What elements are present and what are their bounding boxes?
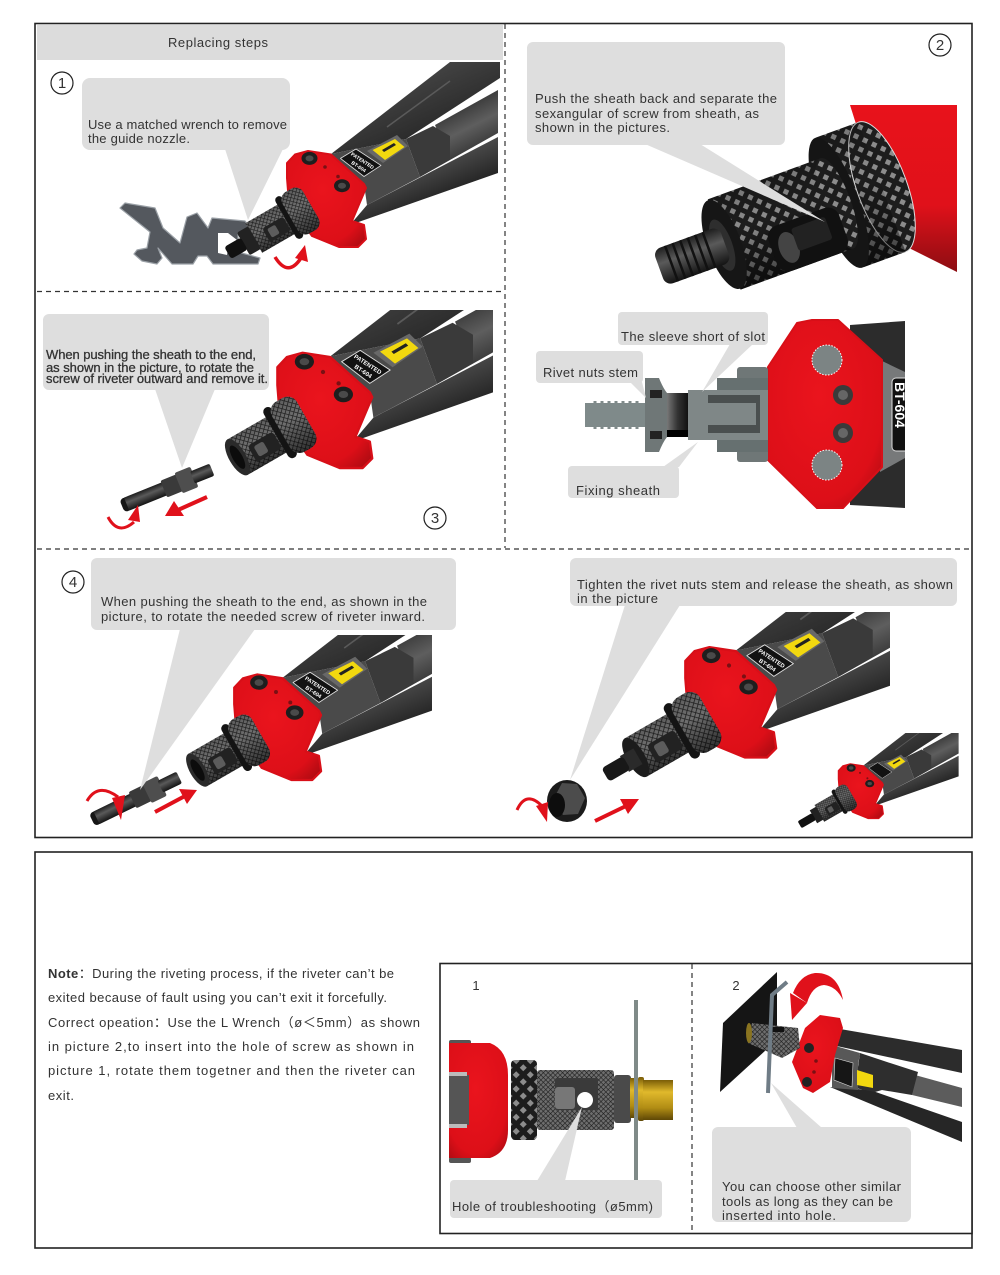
label: rivet nuts stem — [536, 351, 646, 398]
nozzle close-up — [636, 105, 957, 333]
callout: other similar tools: inserted into hole. — [722, 1208, 836, 1223]
callout: when pushing the sheath inward: When pushing the sheath to the end, as shown in the — [101, 594, 427, 609]
riveter — [224, 310, 493, 476]
text block: note: Correct opeation：Use the L Wrench（ø＜5mm）as shown — [48, 1015, 420, 1030]
step number 3 — [424, 507, 446, 529]
arrow: rotate — [517, 799, 548, 822]
riveter: PATENTED — [303, 676, 331, 697]
screw — [118, 459, 216, 516]
riveter side view — [449, 1000, 673, 1182]
text block: note: exit. — [48, 1088, 74, 1103]
riveter: PATENTED — [352, 354, 383, 377]
callout: push the sheath back — [527, 42, 825, 222]
small assembled riveter — [798, 733, 959, 828]
label: the sleeve short of slot — [618, 312, 768, 392]
callout: other similar tools: You can choose other similar — [722, 1179, 902, 1194]
riveter — [225, 62, 500, 258]
arrow: push in — [155, 789, 197, 812]
step number 2 — [929, 34, 951, 56]
picture 1 number: 1 — [472, 978, 480, 993]
callout: other similar tools: tools as long as they can be — [722, 1194, 893, 1209]
riveter: BT-604 — [350, 160, 367, 174]
callout: push the sheath back: sexangular of screw from sheath, as — [535, 106, 760, 121]
riveter: PATENTED — [349, 152, 375, 171]
riveter front view: BT-604 — [892, 382, 908, 428]
callout: push the sheath back: shown in the pictures. — [535, 120, 670, 135]
section of sleeve and stem — [585, 367, 768, 462]
text block: note: picture 1, rotate them togetner and then the riveter can — [48, 1063, 415, 1078]
callout: when pushing the sheath: screw of riveter outward and remove it. — [46, 371, 268, 386]
riveter — [602, 612, 890, 780]
label: the sleeve short of slot: The sleeve short of slot — [621, 329, 765, 344]
picture 2: using L wrench — [712, 972, 962, 1223]
riveter: BT-604 — [304, 685, 323, 701]
screw — [87, 768, 184, 830]
riveter: BT-604 — [353, 364, 373, 380]
step number 1 — [51, 72, 73, 94]
riveter angled view — [746, 1015, 962, 1142]
callout: tighten the rivet nuts stem — [570, 558, 957, 780]
heading: replacing steps: Replacing steps — [168, 35, 268, 50]
picture 2 number: 2 — [732, 978, 740, 993]
text block: note: exited because of fault using you can’t exit it forcefully. — [48, 990, 387, 1005]
step number 1: 1 — [58, 75, 66, 92]
step number 4: 4 — [69, 574, 77, 591]
panel: troubleshooting pictures — [440, 964, 972, 1234]
black plate — [720, 972, 777, 1092]
callout: when pushing the sheath inward: picture, to rotate the needed screw of riveter inward. — [101, 609, 425, 624]
arrow: rotate — [275, 245, 308, 268]
step 4: rotate screw inward — [62, 558, 468, 830]
label: fixing sheath — [568, 442, 698, 498]
callout: tighten the rivet nuts stem: in the picture — [577, 591, 658, 606]
step 1: remove guide nozzle — [51, 62, 500, 274]
panel: note frame — [35, 852, 972, 1248]
callout: hole of troubleshooting: Hole of troubleshooting（ø5mm) — [452, 1199, 653, 1214]
callout: tighten the rivet nuts stem: Tighten the rivet nuts stem and release the sheath, as shown — [577, 577, 953, 592]
rivet nut — [547, 780, 587, 822]
arrow: pull out — [165, 497, 207, 516]
arrow: rotate — [108, 505, 140, 528]
riveter front view — [768, 320, 912, 508]
riveter: PATENTED — [757, 648, 785, 670]
callout: when pushing the sheath: When pushing the sheath to the end, — [46, 347, 256, 362]
step number 3: 3 — [431, 510, 439, 527]
riveter: BT-604 — [757, 658, 777, 674]
text block: note: in picture 2,to insert into the hole of screw as shown in — [48, 1039, 414, 1054]
text block: note — [48, 966, 420, 1103]
icon: wrench — [120, 203, 260, 264]
callout: when pushing the sheath inward — [91, 558, 456, 790]
picture 1: hole of troubleshooting — [449, 1000, 673, 1218]
arrow: rotate — [87, 790, 125, 820]
label: rivet nuts stem: Rivet nuts stem — [543, 365, 638, 380]
callout: other similar tools — [712, 1083, 911, 1223]
callout: use a matched wrench: Use a matched wrench to remove — [88, 117, 287, 132]
cross-section diagram — [536, 312, 912, 508]
panel: replacing steps frame — [35, 24, 972, 838]
L wrench — [768, 982, 787, 1093]
callout: hole of troubleshooting — [450, 1107, 662, 1218]
callout: use a matched wrench: the guide nozzle. — [88, 131, 190, 146]
label: fixing sheath: Fixing sheath — [576, 483, 660, 498]
step 2: separate sexangular screw — [527, 34, 957, 333]
step number 2: 2 — [936, 37, 944, 54]
callout: when pushing the sheath — [43, 314, 269, 468]
arrow: push in — [595, 799, 639, 821]
step number 4 — [62, 571, 84, 593]
step 5: tighten rivet nuts stem — [517, 545, 960, 837]
callout: when pushing the sheath: as shown in the picture, to rotate the — [46, 360, 254, 375]
heading: replacing steps — [37, 25, 503, 60]
callout: push the sheath back: Push the sheath back and separate the — [535, 91, 777, 106]
text block: note: Note：During the riveting process, if the riveter can’t be — [48, 966, 394, 981]
step 3: rotate screw outward — [43, 310, 493, 530]
callout: use a matched wrench — [82, 78, 290, 220]
riveter — [186, 635, 432, 787]
arrow: rotate — [790, 973, 843, 1020]
